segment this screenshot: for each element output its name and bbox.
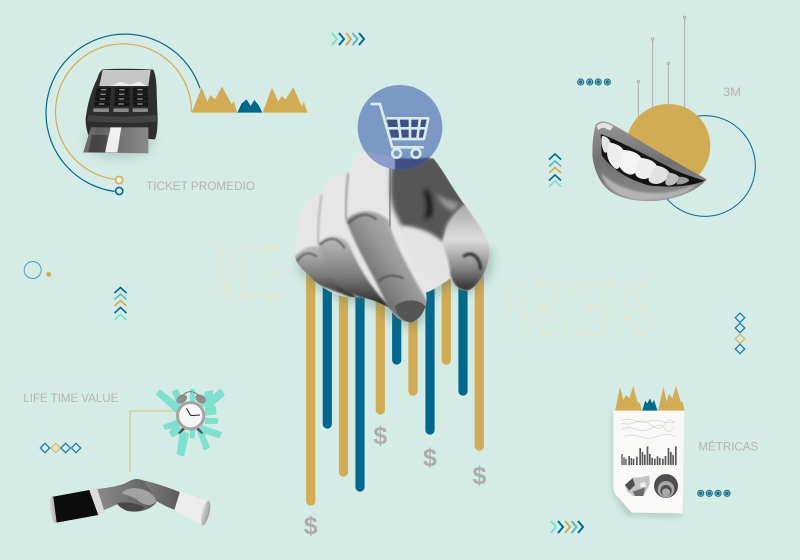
lower lip sheen (602, 173, 697, 201)
stems (637, 16, 686, 120)
panel: ticket promedio (46, 34, 307, 195)
panel: life time value (23, 388, 225, 526)
label: 3M: 3M (723, 85, 741, 99)
ring and dot decoration (24, 262, 51, 278)
blue ring (655, 116, 755, 216)
dollar signs: $ (473, 462, 487, 490)
diamonds left (40, 443, 81, 453)
icon: card terminal (83, 69, 158, 160)
decorative chevrons left (114, 288, 126, 320)
line charts (621, 419, 676, 438)
upper lip highlight (597, 123, 613, 131)
mouth interior (601, 134, 705, 187)
paper shadow (612, 412, 682, 517)
dot row top right (578, 79, 610, 85)
decorative chevrons top (332, 33, 364, 45)
mountain chart (615, 386, 685, 411)
connector line (130, 411, 178, 470)
decorative chevrons right (549, 154, 561, 186)
dark back of hand (390, 156, 467, 243)
dollar signs: $ (373, 422, 387, 450)
connector end dot (129, 469, 131, 472)
label: life time value: LIFE TIME VALUE (23, 391, 118, 405)
dollar signs (304, 422, 487, 540)
dot row bottom right (698, 490, 730, 496)
decorative chevrons bottom (551, 521, 583, 533)
heading: Y VENCERAS: Y VENCERAS (499, 262, 650, 356)
little finger (293, 246, 358, 300)
thumb (442, 205, 490, 291)
gold circle (626, 104, 710, 188)
concentric donut chart (654, 474, 678, 498)
knuckle creases (297, 215, 403, 282)
icon: smiling mouth (592, 122, 706, 202)
icon: handshake (49, 479, 212, 526)
mosaic pie chart (625, 475, 650, 496)
mountain chart (192, 87, 307, 113)
panel: 3M smile (590, 16, 755, 216)
fingernail (395, 300, 426, 323)
dollar signs: $ (304, 512, 318, 540)
connector arcs (46, 34, 200, 195)
hand pointing (290, 147, 497, 328)
teeth (601, 136, 611, 153)
label: ticket promedio: TICKET PROMEDIO (146, 179, 255, 193)
diamonds right (735, 313, 745, 354)
bars (621, 446, 677, 465)
bar chart: dripping bars (311, 270, 479, 501)
hand body (295, 152, 490, 322)
label: metricas: MÉTRICAS (698, 438, 758, 453)
report paper (613, 411, 684, 513)
panel: metricas (612, 386, 758, 517)
dollar signs: $ (423, 444, 437, 472)
hand shadow (297, 237, 493, 328)
index finger (346, 211, 428, 323)
heading: MIDE: MIDE (215, 226, 281, 320)
icon: alarm clock with rays (156, 388, 225, 457)
ring finger (317, 236, 393, 310)
icon: shopping cart circle (357, 85, 442, 173)
palm highlight (400, 227, 450, 282)
hand seen through disc (366, 152, 430, 170)
